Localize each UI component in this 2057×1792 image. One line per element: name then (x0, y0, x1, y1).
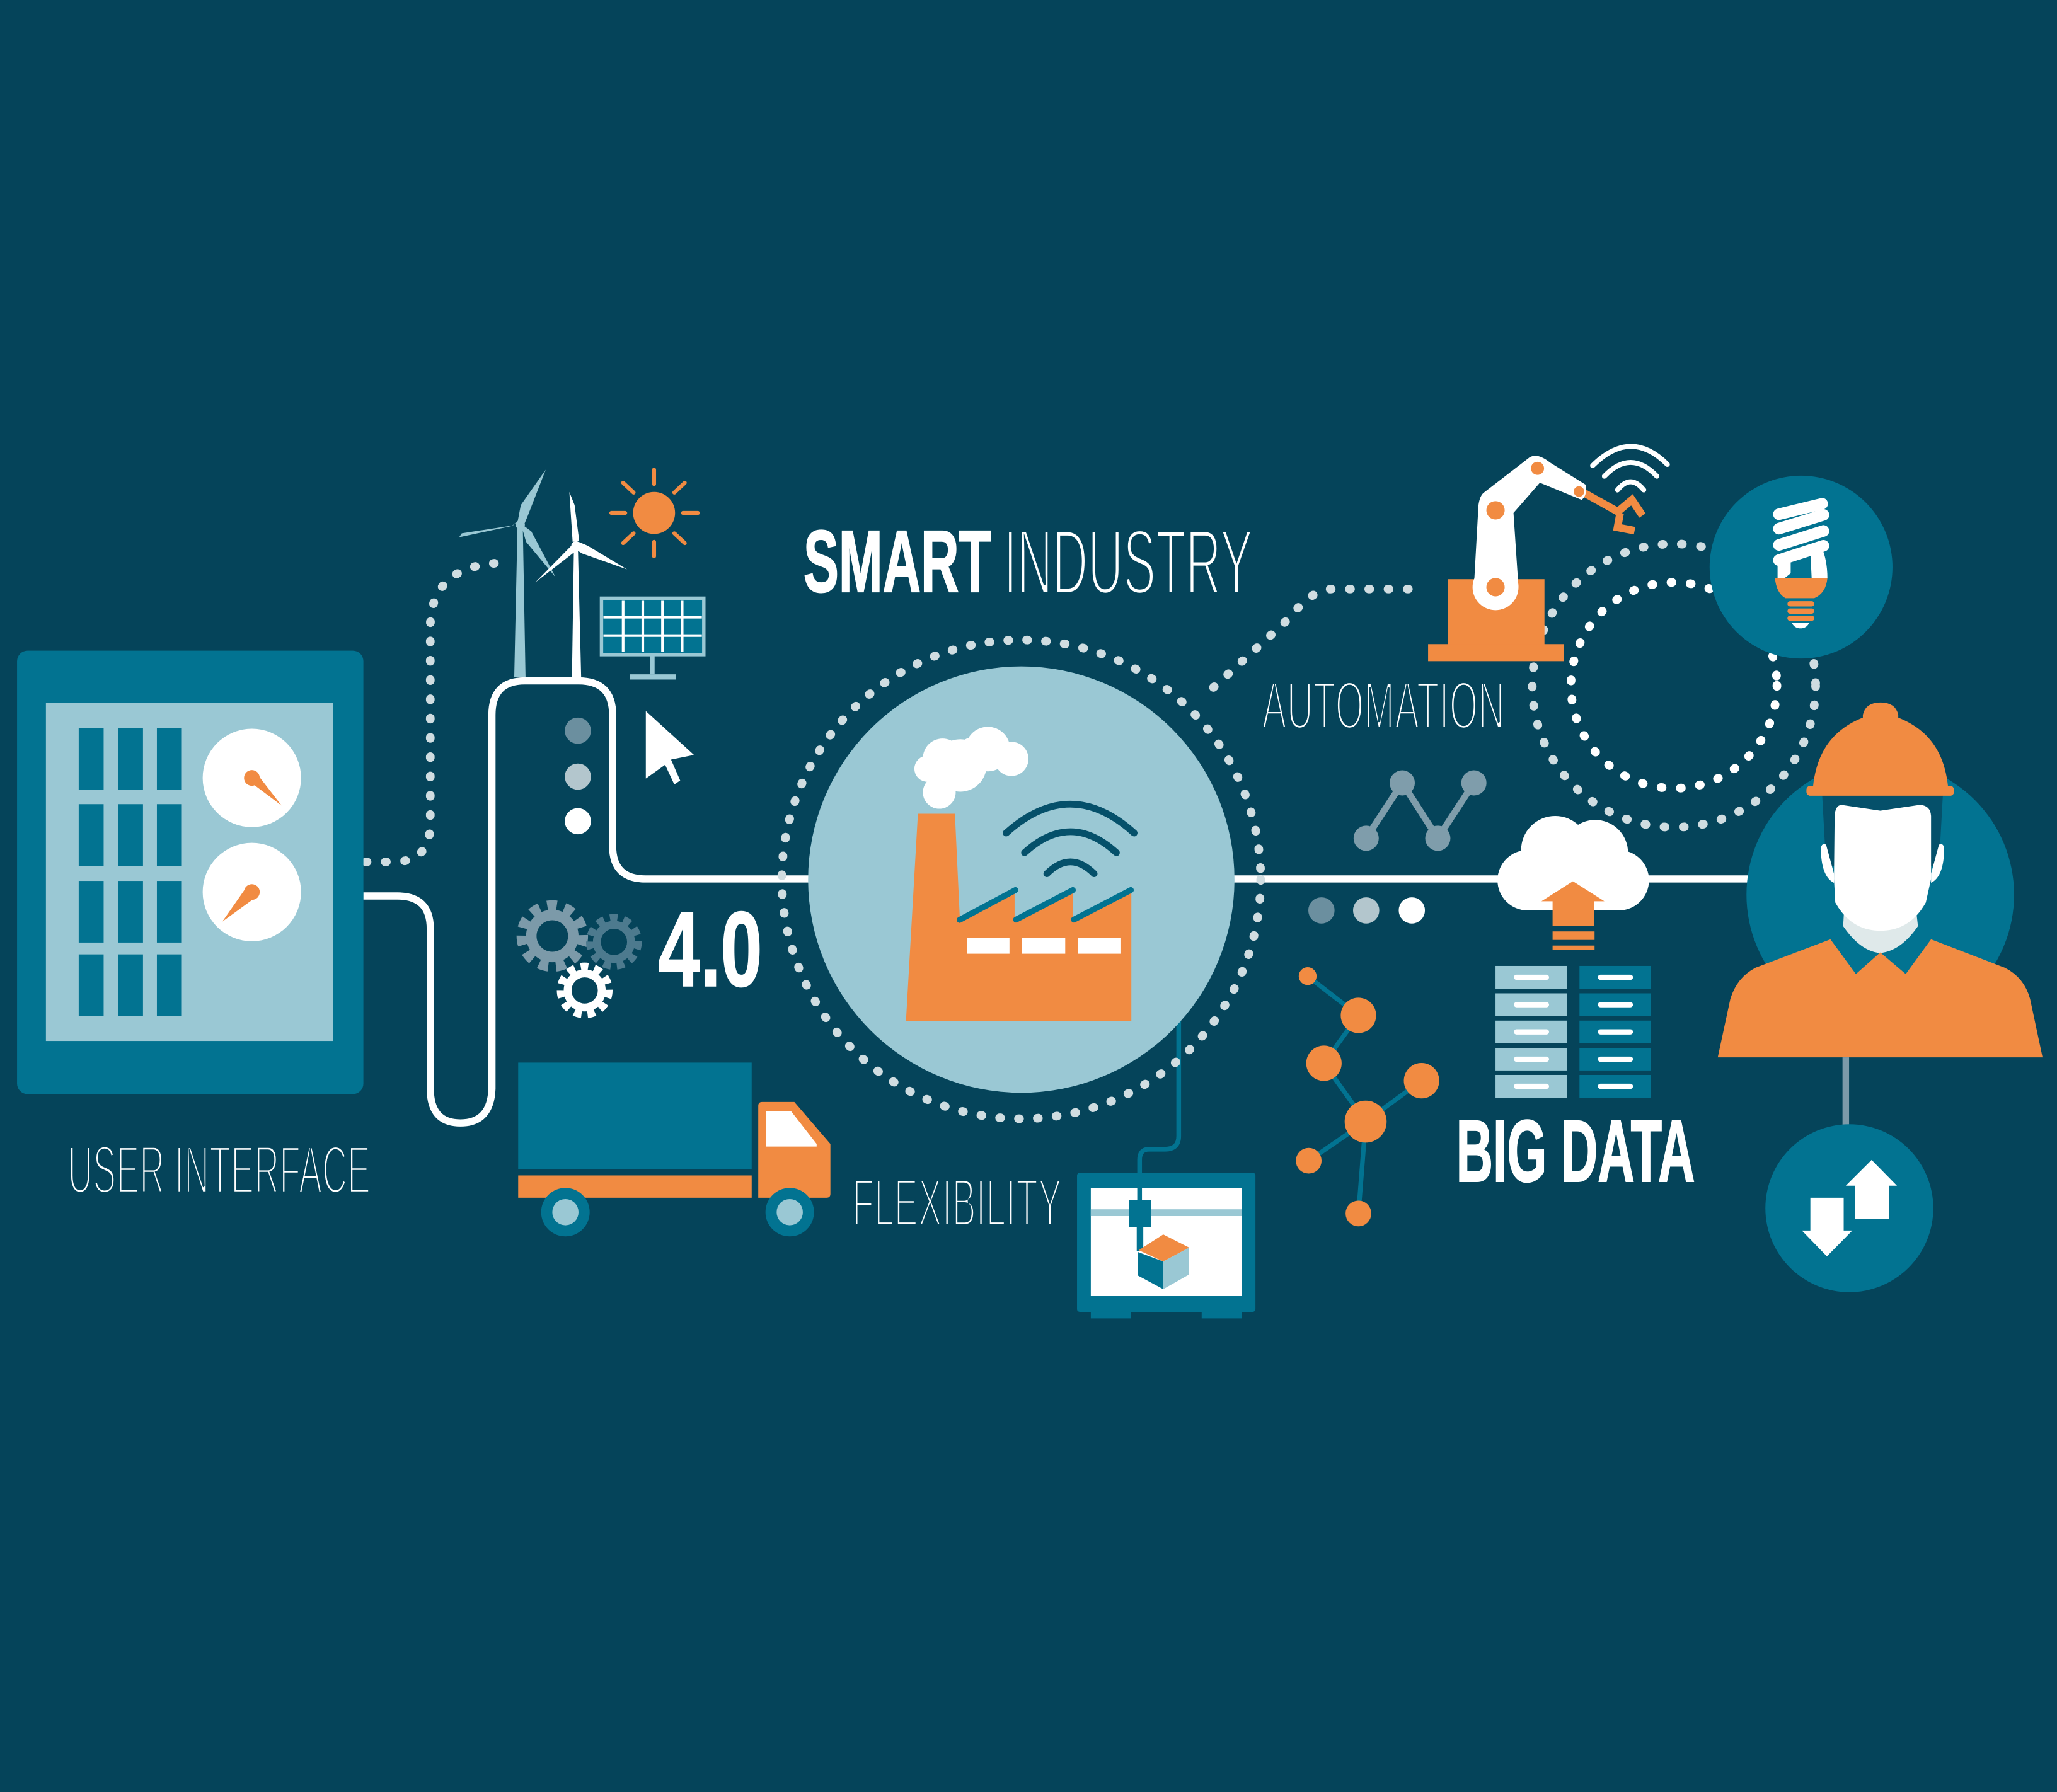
worker hair (1822, 795, 1943, 866)
worker face (1834, 805, 1931, 931)
tablet bar grid (79, 728, 182, 1016)
icon: cloud upload (1497, 816, 1649, 950)
upper gauge (203, 729, 301, 827)
robot gripper (1585, 493, 1642, 531)
dotted ring around factory (782, 640, 1260, 1119)
panel: user interface tablet (17, 651, 364, 1094)
icon: worker (1718, 703, 2043, 1057)
icon: smoke cloud (914, 727, 1028, 809)
icon: robot wifi signal (1593, 446, 1668, 490)
label: user interface: USER INTERFACE (67, 1132, 371, 1208)
printed cube (1138, 1234, 1189, 1289)
icon: factory building (906, 813, 1131, 1021)
icon: factory wifi signal (1006, 804, 1134, 874)
label: flexibility: FLEXIBILITY (852, 1165, 1062, 1241)
icon: sun (611, 469, 698, 556)
panel: central factory disc (808, 667, 1235, 1093)
worker shirt (1718, 939, 2043, 1057)
icon: data cabinets (1495, 966, 1651, 1098)
icon: molecule network (1296, 967, 1439, 1226)
connector: white tube from tablet to factory (364, 681, 814, 1123)
medium gear (590, 917, 638, 966)
chart: line graph icon (1354, 771, 1487, 851)
icon: solar panel (601, 598, 704, 679)
status dots: right group (1308, 897, 1425, 924)
connector: inner dotted ring (1571, 582, 1777, 788)
title (804, 510, 1253, 613)
small white gear (560, 966, 609, 1014)
connector: outer dotted ring (1532, 544, 1816, 827)
icon: mouse cursor (646, 711, 694, 784)
large gear (521, 905, 583, 967)
label: big data: BIG DATA (1456, 1102, 1695, 1200)
title: SMART: SMART (804, 512, 991, 611)
icon: robot arm (1428, 456, 1642, 661)
connector: dotted line from factory to robot (1214, 589, 1424, 687)
title: INDUSTRY: INDUSTRY (1003, 510, 1253, 613)
label: automation: AUTOMATION (1262, 668, 1505, 744)
icon: light wind turbine (459, 469, 556, 677)
connector: worker to arrows (1843, 1057, 1849, 1125)
icon: up and down arrows circle (1765, 1124, 1933, 1292)
icon: gears (521, 905, 638, 1014)
icon: delivery truck (518, 1062, 831, 1236)
lower gauge (203, 843, 301, 941)
icon: white wind turbine (535, 492, 627, 677)
label: 4.0: 4.0 (659, 890, 762, 1009)
worker neck (1843, 902, 1918, 953)
worker backdrop circle (1746, 761, 2014, 1028)
connector: dotted line from tablet to wind turbines (366, 563, 505, 862)
connector: teal line from factory to 3D printer (1139, 1021, 1178, 1200)
status dots: left group (565, 718, 591, 834)
worker hard hat (1806, 703, 1954, 796)
icon: 3D printer (1077, 1173, 1255, 1318)
icon: light bulb in circle (1710, 476, 1893, 658)
worker ears (1821, 844, 1944, 883)
connector: white line from factory to worker (1231, 877, 1758, 881)
